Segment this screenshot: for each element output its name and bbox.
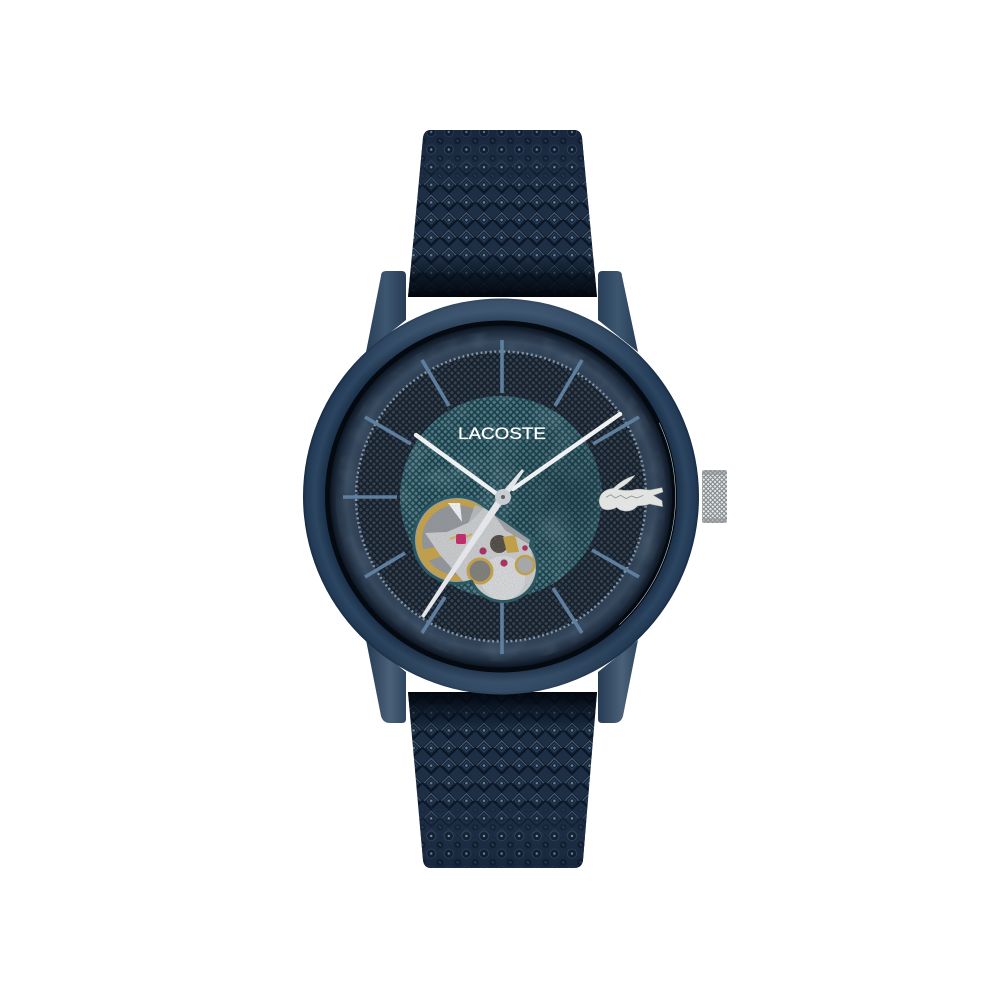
dial [330, 326, 672, 668]
watch hands [416, 414, 620, 618]
dial textured field [356, 352, 646, 642]
dial outer ring [330, 326, 672, 668]
strap: lower [408, 692, 597, 868]
skeleton aperture with movement [410, 495, 545, 605]
aperture rim [412, 495, 539, 603]
minute hand [513, 414, 620, 489]
centre pinion [495, 489, 511, 505]
product image: watch [303, 130, 727, 868]
strap: upper [408, 130, 597, 297]
lugs [366, 271, 638, 723]
case bezel [269, 265, 733, 728]
movement [415, 498, 536, 600]
crown [702, 470, 727, 523]
hour hand [416, 435, 501, 497]
brand logo text: LACOSTE [458, 424, 546, 443]
dial dotted track [356, 352, 646, 642]
dial teal centre disc [400, 396, 602, 598]
seconds hand [421, 469, 524, 618]
jewels [456, 534, 528, 567]
hour markers [343, 340, 639, 654]
crocodile emblem [599, 475, 663, 511]
dial ring marbling [336, 332, 666, 662]
